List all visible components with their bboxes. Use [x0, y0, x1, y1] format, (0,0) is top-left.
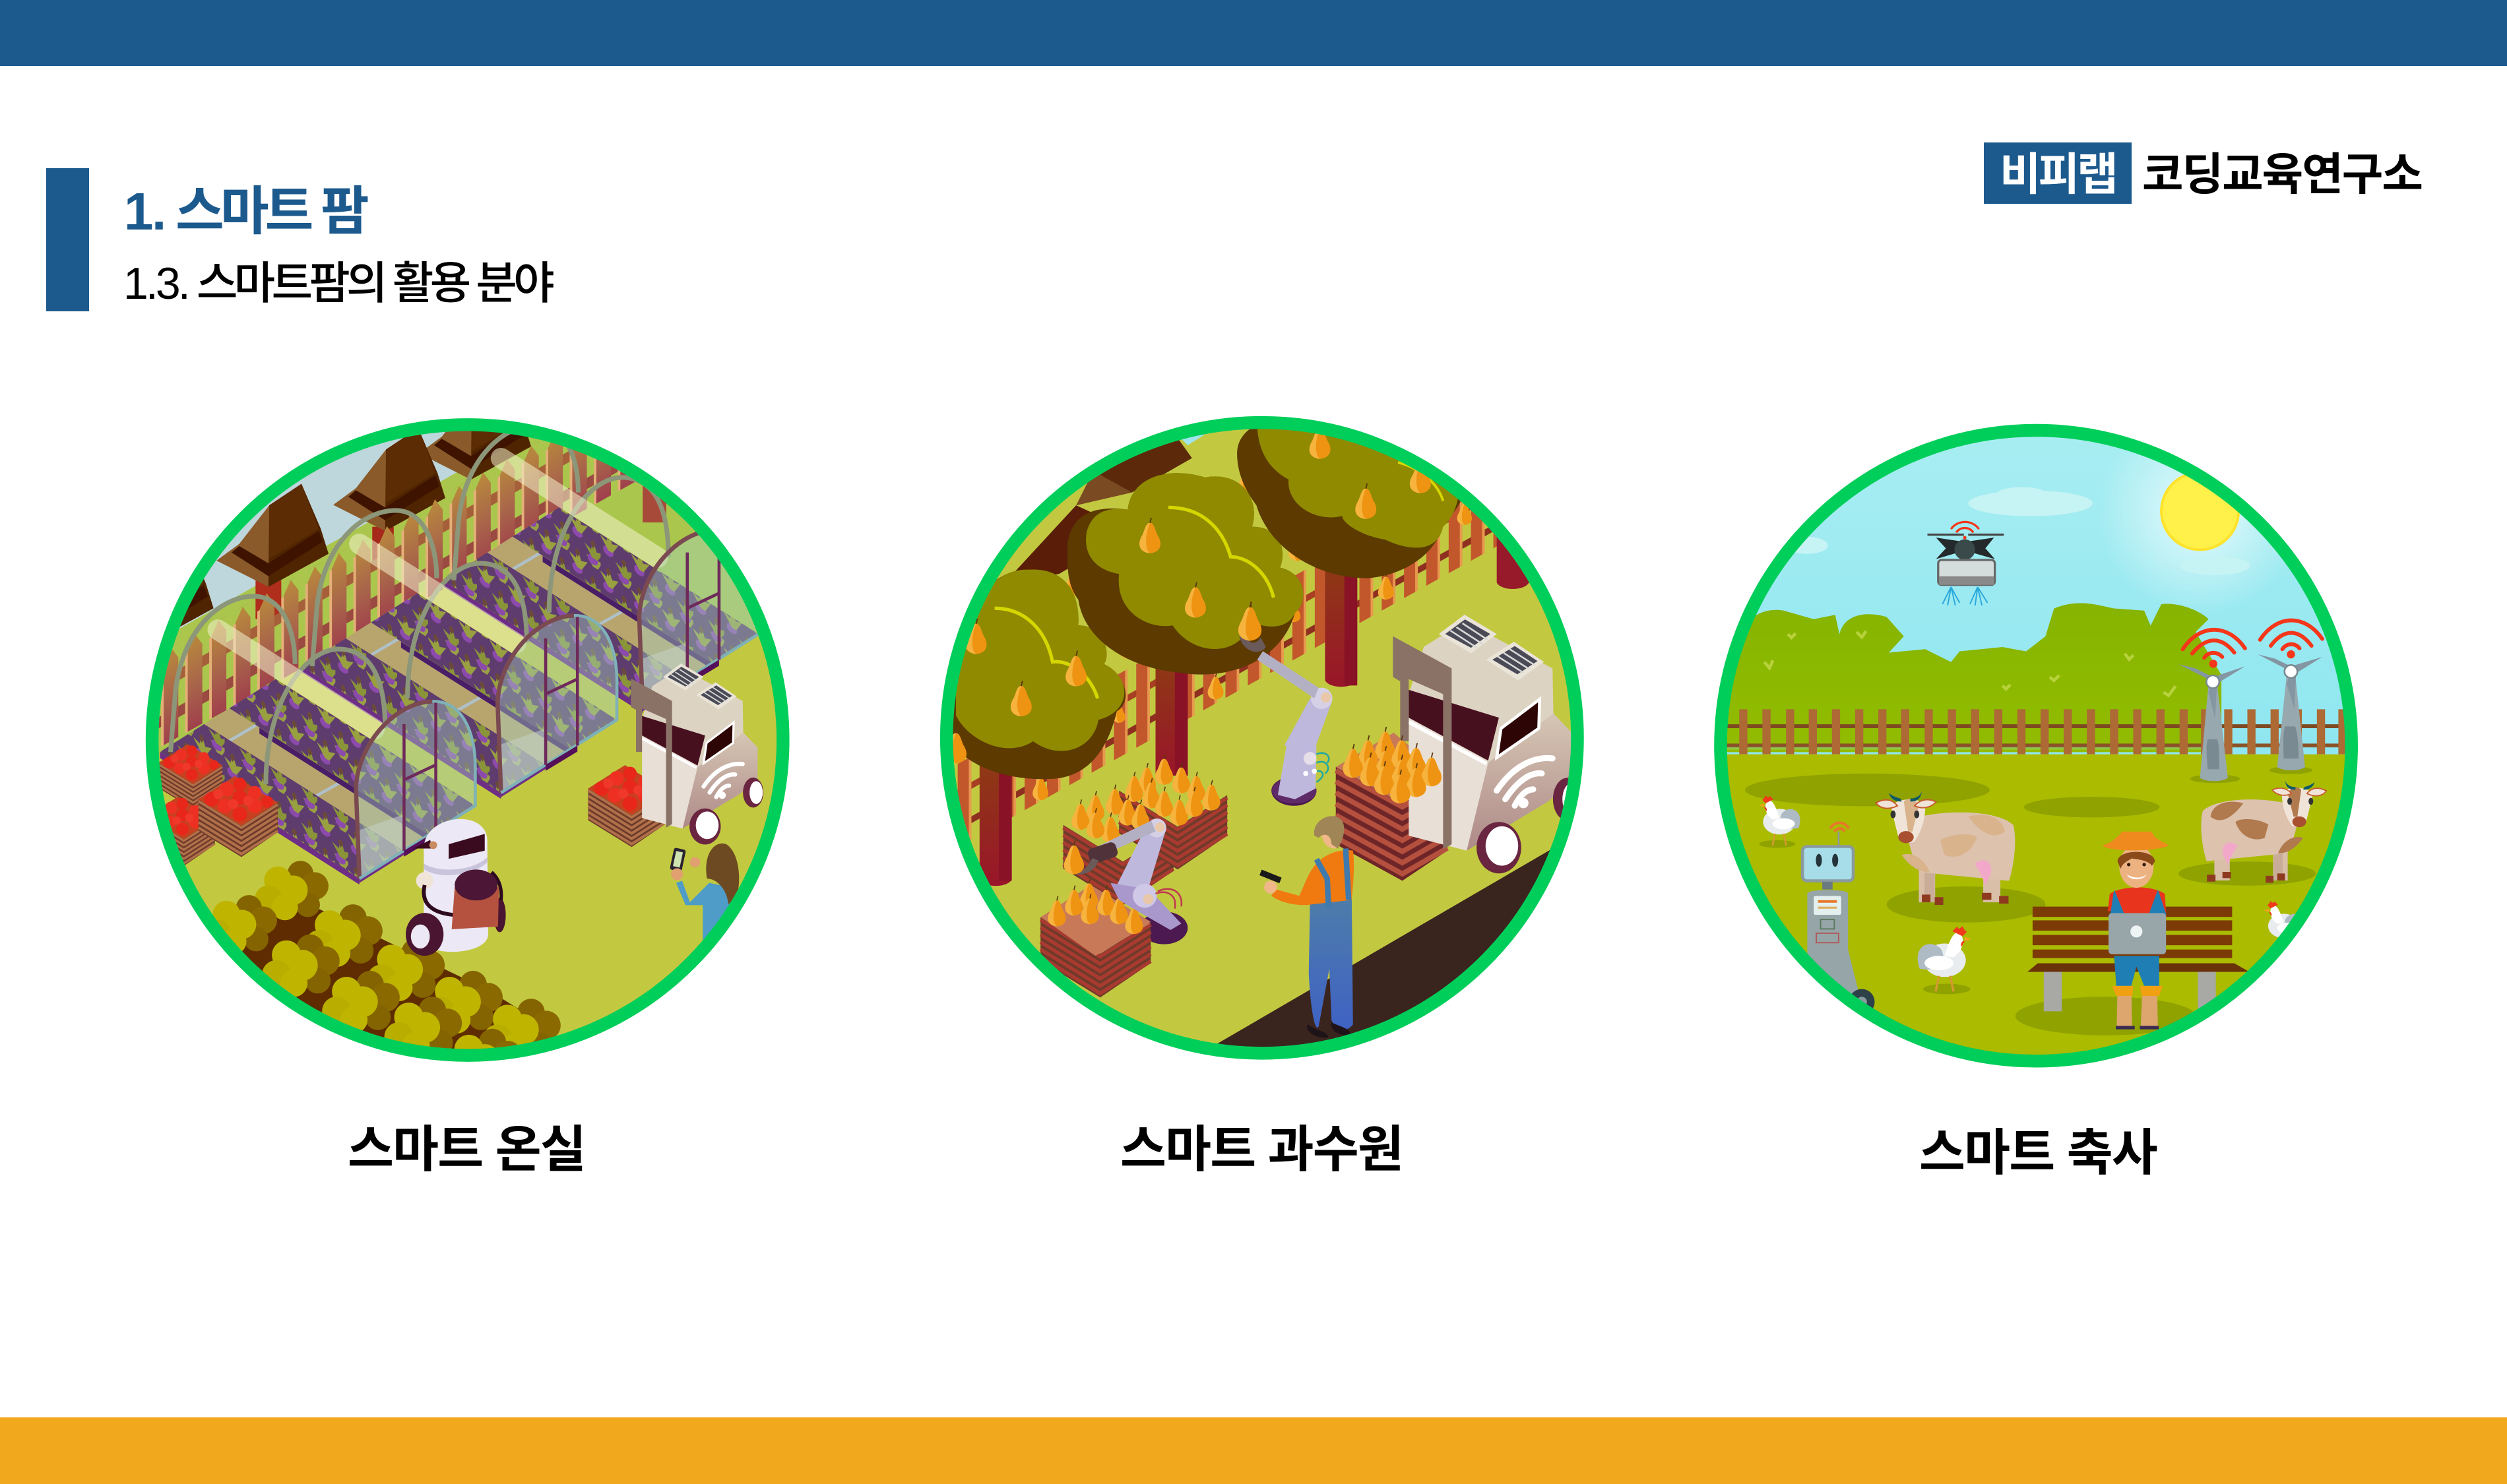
delivery truck — [631, 664, 763, 844]
hens — [1759, 795, 2303, 991]
logo badge — [1984, 142, 2132, 204]
crate pears — [1343, 727, 1442, 803]
panel: smart greenhouse — [145, 418, 790, 1178]
label: smart orchard: 스마트 과수원 — [1120, 1122, 1403, 1178]
service robot — [1802, 822, 1875, 1053]
cow left — [1876, 791, 2015, 905]
circle frame — [947, 423, 1577, 1053]
panel: smart orchard — [939, 416, 1584, 1178]
leaf ticks — [1764, 631, 2176, 696]
big crate — [1336, 733, 1447, 881]
circle frame — [1721, 431, 2351, 1061]
road — [1213, 832, 1603, 1075]
pear crates back — [1063, 755, 1227, 906]
top banner — [0, 0, 2507, 66]
delivery truck — [1393, 615, 1582, 873]
wind turbines — [2178, 654, 2322, 781]
background trees — [1015, 434, 1205, 574]
wooden fence — [1726, 709, 2346, 755]
farmer in overalls — [1259, 816, 1354, 1037]
logo block — [1984, 142, 2422, 204]
logo name: 비피랩 — [2000, 150, 2116, 200]
bench — [2027, 907, 2249, 1011]
sun — [2161, 472, 2238, 549]
front crate and arm — [1040, 819, 1188, 997]
section marker bar — [46, 168, 89, 311]
bottom banner — [0, 1417, 2507, 1484]
illustration: greenhouse circle — [145, 418, 790, 1062]
trees — [102, 377, 666, 641]
pear tree center — [1067, 473, 1304, 675]
pear tree right — [1237, 416, 1465, 578]
wifi signals — [2183, 621, 2322, 666]
heading: chapter title: 1. 스마트 팜 — [124, 182, 365, 241]
cow right — [2201, 780, 2326, 882]
pear tree left — [945, 569, 1126, 779]
drone — [1928, 522, 2004, 605]
greenhouse rows — [160, 425, 759, 884]
clouds — [1787, 487, 2250, 575]
far pears on ground — [1032, 468, 1472, 801]
picket fence — [158, 441, 635, 747]
trunks — [980, 536, 1529, 886]
panel: smart livestock barn — [1714, 423, 2358, 1181]
ground shadows — [1745, 766, 2316, 1036]
orchard fence — [957, 501, 1497, 840]
heading: section subtitle: 1.3. 스마트팜의 활용 분야 — [123, 259, 551, 309]
lettuce patch — [212, 861, 561, 1049]
label: smart livestock barn: 스마트 축사 — [1919, 1125, 2157, 1181]
woman with tablet — [670, 844, 739, 941]
meadow — [1702, 755, 2375, 1082]
farmer with laptop — [2102, 832, 2169, 1030]
tomato crates — [147, 744, 668, 866]
label: smart greenhouse: 스마트 온실 — [348, 1122, 585, 1178]
illustration: livestock circle — [1714, 423, 2358, 1067]
logo subtitle: 코딩교육연구소 — [2142, 150, 2422, 200]
farm robot — [406, 819, 506, 956]
illustration: orchard circle — [939, 416, 1584, 1060]
circle frame — [152, 425, 783, 1055]
harvesting arm upper — [1238, 602, 1333, 806]
tree line — [1719, 603, 2221, 752]
